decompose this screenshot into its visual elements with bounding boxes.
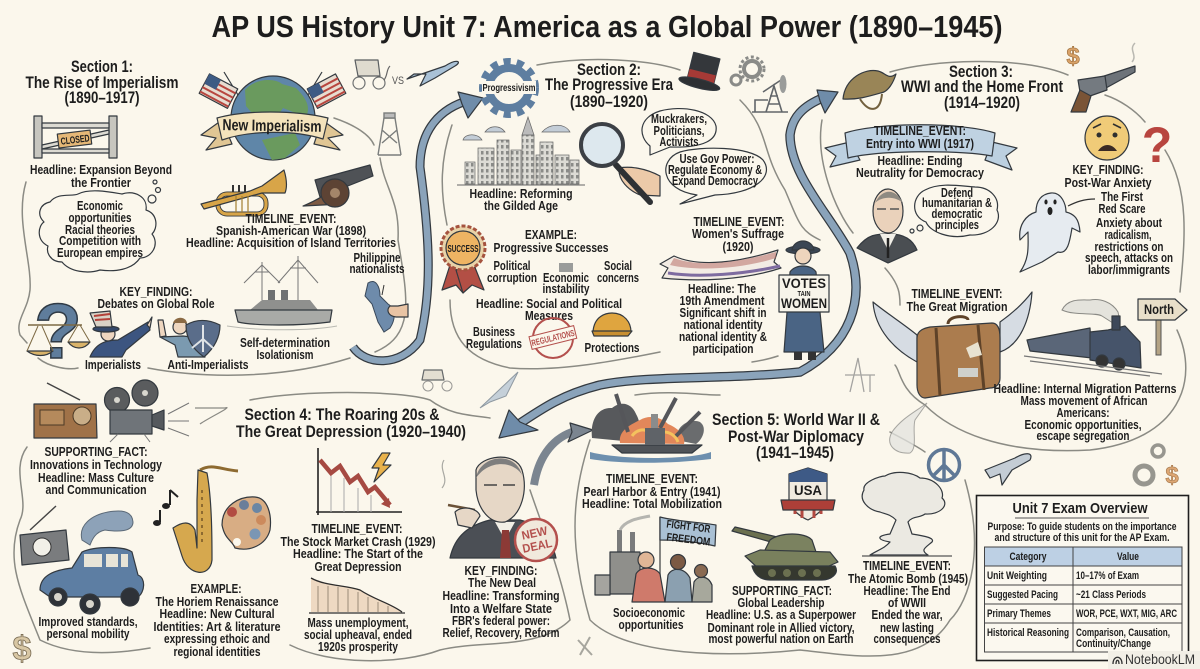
icon: progressivism gear: Progressivism (482, 83, 536, 94)
text: the New Deal: The New Deal (468, 575, 536, 590)
text: Pearl Harbor: Pearl Harbor & Entry (1941) (584, 484, 720, 499)
icon: oil derrick (378, 113, 401, 155)
text: progressive successes: Regulations (466, 336, 522, 351)
text: atomic bomb: TIMELINE_EVENT: (863, 558, 951, 573)
chart: stock market crash (316, 448, 402, 515)
text: mass unemployment (304, 615, 412, 654)
text: red scare: The First (1101, 189, 1144, 204)
text: internal migration patterns: escape segregation (1036, 428, 1130, 443)
text: innovations in technology (30, 444, 163, 497)
text: Spanish-American War: Headline: Acquisition of Island Territories (186, 235, 396, 250)
text: atomic bomb: Ended the war, (872, 607, 942, 622)
icon: ghost (1020, 193, 1095, 272)
thought cloud: motives: Racial theories (65, 222, 135, 237)
text: red scare: labor/immigrants (1088, 262, 1170, 277)
icon: city skyline (457, 117, 585, 185)
text: reforming the Gilded Age (470, 186, 573, 213)
text: global leadership: Global Leadership (738, 595, 825, 610)
text: Philippine nationalists: Philippine (354, 250, 400, 265)
text: debates on global role: Debates on Global Role (98, 296, 214, 311)
icon: gears and dollar: $ (1165, 462, 1179, 489)
panel: Unit 7 exam overview (976, 496, 1188, 660)
icon: closed gate: CLOSED (60, 133, 90, 148)
icon: closed gate (34, 116, 117, 158)
text: progressive successes: Economic (543, 270, 589, 285)
heading: section 4 (236, 405, 466, 441)
panel: decorative margin sketches (422, 358, 927, 655)
speech bubble: muckrakers: Muckrakers, (651, 111, 707, 126)
text: progressive successes (466, 227, 640, 355)
banner: entry into WWI: Entry into WWI (1917) (866, 136, 974, 151)
text: Harlem Renaissance example: expressing ethoic and (164, 631, 270, 646)
icon: factory and workers with flag (595, 516, 716, 602)
text: women's suffrage: (1920) (722, 239, 754, 254)
heading: section 2 (545, 60, 673, 111)
text: expansion headline (30, 162, 172, 190)
icon: saxophone and notes (153, 467, 238, 572)
text: post-war anxiety: KEY_FINDING: (1072, 162, 1144, 177)
icon: carriage vs plane (353, 60, 458, 89)
icon: hard hat (592, 313, 632, 336)
speech bubble: government power: Expand Democracy (672, 173, 759, 188)
text: the New Deal (442, 563, 560, 640)
text: Harlem Renaissance example: The Horiem Renaissance (156, 594, 278, 609)
icon: radio (34, 383, 97, 438)
text: progressive successes: Social (604, 258, 632, 273)
text: progressive successes: Political (494, 258, 530, 273)
icon: Uncle Sam imperialist (90, 311, 152, 357)
icon: Philippines map with hand (365, 282, 408, 332)
thought cloud: defend principles: democratic (932, 206, 982, 221)
icon: dollar sign small: $ (13, 630, 32, 668)
title: AP US History Unit 7: America as a Global Power (1890–1945) (212, 9, 1002, 44)
text: women's suffrage: TIMELINE_EVENT: (694, 214, 784, 229)
speech bubble: muckrakers (642, 109, 716, 155)
icon: squiggle (195, 408, 227, 424)
icon: trumpet (201, 170, 286, 214)
thought cloud: defend principles (910, 185, 998, 237)
text: Spanish-American War: Spanish-American War (1898) (216, 223, 366, 238)
icon: worried face and question mark (1085, 116, 1172, 173)
speech bubble: muckrakers: Politicians, (654, 123, 704, 138)
text: stock market crash: Great Depression (314, 559, 402, 574)
text: women's suffrage: Headline: The (688, 281, 756, 296)
text: innovations in technology: and Communication (46, 482, 147, 497)
speech bubble: muckrakers: Activists (660, 134, 698, 149)
table: exam data: Unit Weighting (987, 570, 1047, 582)
icon: helmet (843, 70, 896, 109)
text: the New Deal: Headline: Transforming (442, 588, 560, 603)
text: socioeconomic opportunities (613, 605, 685, 632)
thought cloud: defend principles: Defend (941, 185, 973, 200)
heading: section 3: (1914–1920) (944, 93, 1020, 112)
heading: section 2: (1890–1920) (570, 92, 648, 111)
text: red scare (1085, 189, 1173, 277)
icon: gears and dollar (1135, 445, 1179, 489)
thought cloud: motives: Competition with (59, 233, 141, 248)
text: Pearl Harbor (582, 471, 722, 511)
text: women's suffrage: national identity & (679, 329, 767, 344)
text: self-determination (240, 335, 330, 362)
heading: exam overview: Unit 7 Exam Overview (1012, 500, 1148, 517)
text: internal migration patterns: Mass movement of African (1020, 393, 1148, 408)
text: global leadership: SUPPORTING_FACT: (732, 583, 832, 598)
icon: FDR portrait with New Deal stamp: DEAL (521, 536, 553, 556)
icon: worried face and question mark: ? (1142, 117, 1172, 173)
text: women's suffrage (679, 214, 784, 356)
icon: peace sign (928, 450, 960, 481)
text: expansion headline: the Frontier (71, 175, 131, 190)
text: women's suffrage: Significant shift in (680, 305, 767, 320)
panel: section 1 (26, 57, 458, 375)
text: purpose (988, 521, 1176, 544)
heading: section 1: (1890–1917) (64, 88, 140, 107)
text: Philippine nationalists: nationalists (350, 261, 404, 276)
text: progressive successes: instability (542, 281, 590, 296)
icon: Pearl Harbor battleship (590, 394, 711, 463)
text: debates on global role: KEY_FINDING: (120, 284, 192, 299)
icon: question mark and scales: ? (34, 287, 82, 375)
text: Harlem Renaissance example: Headline: New Cultural (160, 606, 274, 621)
text: global leadership: most powerful nation on Earth (708, 631, 854, 646)
text: red scare: speech, attacks on (1085, 250, 1173, 265)
text: the New Deal: Into a Welfare State (450, 601, 552, 616)
thought cloud: motives (39, 180, 161, 272)
text: women's suffrage: 19th Amendment (680, 293, 765, 308)
text: Pearl Harbor: TIMELINE_EVENT: (606, 471, 698, 486)
icon: tank (732, 527, 838, 580)
icon: anti-imperialist with peace shield (158, 318, 220, 357)
text: progressive successes: Measures (525, 308, 573, 323)
text: stock market crash (280, 521, 436, 574)
text: great migration heading: The Great Migration (906, 299, 1008, 314)
icon: USA shield (781, 468, 835, 520)
text: socioeconomic opportunities: opportunities (618, 617, 684, 632)
text: great migration heading: TIMELINE_EVENT: (912, 286, 1002, 301)
icon: globe with New Imperialism banner: New Imperialism (222, 117, 322, 136)
text: Spanish-American War: TIMELINE_EVENT: (246, 211, 336, 226)
icon: suffragist with sign: VOTES (782, 275, 826, 291)
speech bubble: government power: Regulate Economy & (668, 162, 762, 177)
icon: North signpost: North (1144, 301, 1174, 317)
arrow: section 2 to section 3 and section 5 (499, 90, 856, 438)
text: great migration heading (906, 286, 1008, 314)
table: exam data: Historical Reasoning (987, 627, 1069, 639)
text: internal migration patterns (994, 381, 1176, 443)
text: red scare: Anxiety about (1096, 215, 1163, 230)
icon: cannon (303, 165, 373, 207)
heading: section 5: Post-War Diplomacy (728, 427, 864, 446)
panel: section 5 (582, 394, 1179, 646)
icon: mushroom cloud (862, 472, 952, 556)
heading: section 1 (26, 57, 178, 107)
text: internal migration patterns: Economic opportunities, (1024, 417, 1142, 432)
text: atomic bomb: Headline: The End (864, 583, 951, 598)
text: atomic bomb: of WWII (888, 595, 926, 610)
text: atomic bomb: consequences (874, 631, 940, 646)
icon: success rosette (441, 226, 485, 293)
banner: entry into WWI: TIMELINE_EVENT: (874, 123, 966, 138)
arrow: section 1 to section 2 (353, 92, 483, 361)
panel: section 3 (825, 43, 1187, 443)
text: women's suffrage: Women's Suffrage (692, 226, 784, 241)
text: debates on global role: Imperialists (85, 357, 141, 372)
text: reforming the Gilded Age: Headline: Reforming (470, 186, 573, 201)
thought cloud: motives: Economic (77, 198, 123, 213)
text: innovations in technology: SUPPORTING_FACT: (44, 444, 148, 459)
heading: section 5 (712, 410, 880, 462)
text: mass unemployment: social upheaval, ended (304, 627, 412, 642)
text: post-war anxiety: Post-War Anxiety (1064, 175, 1152, 190)
text: atomic bomb: The Atomic Bomb (1945) (848, 571, 968, 586)
icon: FDR portrait with New Deal stamp: NEW (520, 523, 549, 543)
heading: section 2: The Progressive Era (545, 75, 673, 94)
text: global leadership: Headline: U.S. as a Superpower (706, 607, 856, 622)
text: progressive successes: concerns (597, 270, 639, 285)
panel: section 2 (441, 50, 829, 360)
table: exam data: Value (1117, 551, 1139, 563)
icon: airplane (985, 454, 1031, 485)
text: progressive successes: corruption (487, 270, 537, 285)
text: progressive successes: Progressive Successes (494, 240, 608, 255)
icon: globe with New Imperialism banner (199, 72, 346, 160)
icon: suffragist with sign (779, 241, 829, 360)
text: Harlem Renaissance example (154, 581, 280, 659)
icon: factory and workers with flag: FREEDOM (666, 531, 711, 549)
icon: painter palette (222, 497, 270, 549)
icon: gears and pump (731, 57, 788, 112)
chart: depression decline (309, 578, 405, 613)
icon: vintage car (40, 548, 144, 614)
text: stock market crash: Headline: The Start of the (293, 546, 423, 561)
text: stock market crash: The Stock Market Crash (1929) (280, 534, 436, 549)
text: mass unemployment: 1920s prosperity (318, 639, 399, 654)
text: innovations in technology: Headline: Mass Culture (38, 470, 154, 485)
icon: winged suitcase (873, 292, 1032, 398)
table: exam data: Comparison, Causation, (1076, 627, 1170, 639)
table: exam data: Primary Themes (987, 608, 1051, 620)
icon: carriage vs plane: VS (392, 75, 404, 87)
heading: section 1: Section 1: (71, 57, 133, 76)
text: Pearl Harbor: Headline: Total Mobilization (582, 496, 722, 511)
icon: Woodrow Wilson portrait (857, 189, 917, 263)
text: Harlem Renaissance example: Identities: Art & literature (154, 619, 280, 634)
text: ending neutrality (856, 153, 985, 180)
icon: magnifying glass in hand (581, 124, 660, 202)
text: the New Deal: FBR's federal power: (452, 613, 550, 628)
thought cloud: defend principles: humanitarian & (922, 195, 992, 210)
text: internal migration patterns: Americans: (1056, 405, 1110, 420)
text: red scare: Red Scare (1098, 201, 1146, 216)
icon: regulations stamp: REGULATIONS (530, 328, 576, 348)
icon: suffragist with sign: WOMEN (781, 295, 827, 311)
icon: battleship (227, 256, 337, 330)
text: progressive successes: EXAMPLE: (525, 227, 577, 242)
thought cloud: defend principles: principles (935, 217, 979, 232)
text: ending neutrality: Neutrality for Democracy (856, 165, 985, 180)
icon: film projector (104, 380, 189, 442)
icon: North signpost (1138, 299, 1187, 355)
icon: progressivism gear (482, 62, 536, 114)
table: exam data: Suggested Pacing (987, 589, 1058, 601)
text: red scare: restrictions on (1094, 239, 1164, 254)
text: improved standards (38, 614, 138, 641)
text: Spanish-American War (186, 211, 396, 250)
heading: section 5: (1941–1945) (756, 443, 834, 462)
text: improved standards: Improved standards, (38, 614, 138, 629)
icon: USA shield: USA (794, 482, 822, 498)
table: exam data: Category (1010, 551, 1047, 563)
icon: regulations stamp (529, 318, 577, 358)
text: Harlem Renaissance example: EXAMPLE: (190, 581, 242, 596)
text: Philippine nationalists (350, 250, 404, 276)
icon: smoke cloud (81, 511, 133, 545)
icon: top hat (678, 50, 727, 93)
text: post-war anxiety (1064, 162, 1152, 190)
text: global leadership: Dominant role in Allied victory, (708, 620, 854, 635)
text: progressive successes: Business (473, 324, 515, 339)
speech bubble: government power (666, 148, 766, 204)
text: self-determination: Self-determination (240, 335, 330, 350)
icon: steam train (1024, 300, 1162, 376)
text: mass unemployment: Mass unemployment, (308, 615, 408, 630)
text: red scare: radicalism, (1104, 227, 1152, 242)
table: exam data (984, 547, 1182, 652)
icon: small tool (559, 263, 573, 272)
arrow: section 4 to section 5 (534, 423, 593, 485)
text: atomic bomb: new lasting (880, 620, 934, 635)
text: debates on global role: Anti-Imperialists (168, 357, 248, 372)
text: expansion headline: Headline: Expansion Beyond (30, 162, 172, 177)
banner: entry into WWI (825, 123, 1017, 170)
text: Harlem Renaissance example: regional identities (174, 644, 260, 659)
icon: suffrage ribbon (660, 250, 781, 280)
icon: success rosette: SUCCESS (448, 244, 479, 255)
heading: section 3: WWI and the Home Front (901, 77, 1063, 96)
thought cloud: motives: opportunities (68, 210, 132, 225)
text: progressive successes: Protections (584, 340, 640, 355)
text: women's suffrage: participation (692, 341, 754, 356)
icon: dollar sign: $ (1066, 43, 1080, 70)
icon: FDR portrait with New Deal stamp (442, 457, 557, 561)
icon: television (20, 506, 69, 565)
text: stock market crash: TIMELINE_EVENT: (312, 521, 402, 536)
panel: section 4 (13, 380, 560, 668)
text: women's suffrage: national identity (684, 317, 763, 332)
text: improved standards: personal mobility (46, 626, 130, 641)
heading: section 4: Section 4: The Roaring 20s & (244, 405, 440, 424)
text: reforming the Gilded Age: the Gilded Age (484, 198, 558, 213)
heading: section 2: Section 2: (577, 60, 641, 79)
heading: section 4: The Great Depression (1920–1940) (236, 422, 466, 441)
text: the New Deal: KEY_FINDING: (464, 563, 538, 578)
heading: section 1: The Rise of Imperialism (26, 73, 178, 92)
text: socioeconomic opportunities: Socioeconomic (613, 605, 685, 620)
icon: revolver (1071, 43, 1135, 112)
text: ending neutrality: Headline: Ending (878, 153, 963, 168)
table: exam data: Continuity/Change (1076, 638, 1151, 650)
text: self-determination: Isolationism (256, 347, 314, 362)
text: progressive successes: Headline: Social and Political (476, 296, 622, 311)
text: innovations in technology: Innovations in Technology (30, 457, 163, 472)
text: debates on global role (85, 284, 248, 372)
thought cloud: motives: European empires (57, 245, 143, 260)
text: the New Deal: Relief, Recovery, Reform (442, 625, 560, 640)
table: exam data: ~21 Class Periods (1076, 589, 1146, 601)
speech bubble: government power: Use Gov Power: (680, 151, 754, 166)
heading: section 3 (901, 62, 1063, 112)
table: exam data: 10–17% of Exam (1076, 570, 1139, 582)
icon: factory and workers with flag: FIGHT FOR (666, 518, 711, 536)
heading: section 5: Section 5: World War II & (712, 410, 880, 429)
text: global leadership (706, 583, 856, 646)
heading: section 3: Section 3: (949, 62, 1013, 81)
icon: suffragist with sign: TAIN (798, 291, 810, 298)
text: atomic bomb (848, 558, 968, 646)
